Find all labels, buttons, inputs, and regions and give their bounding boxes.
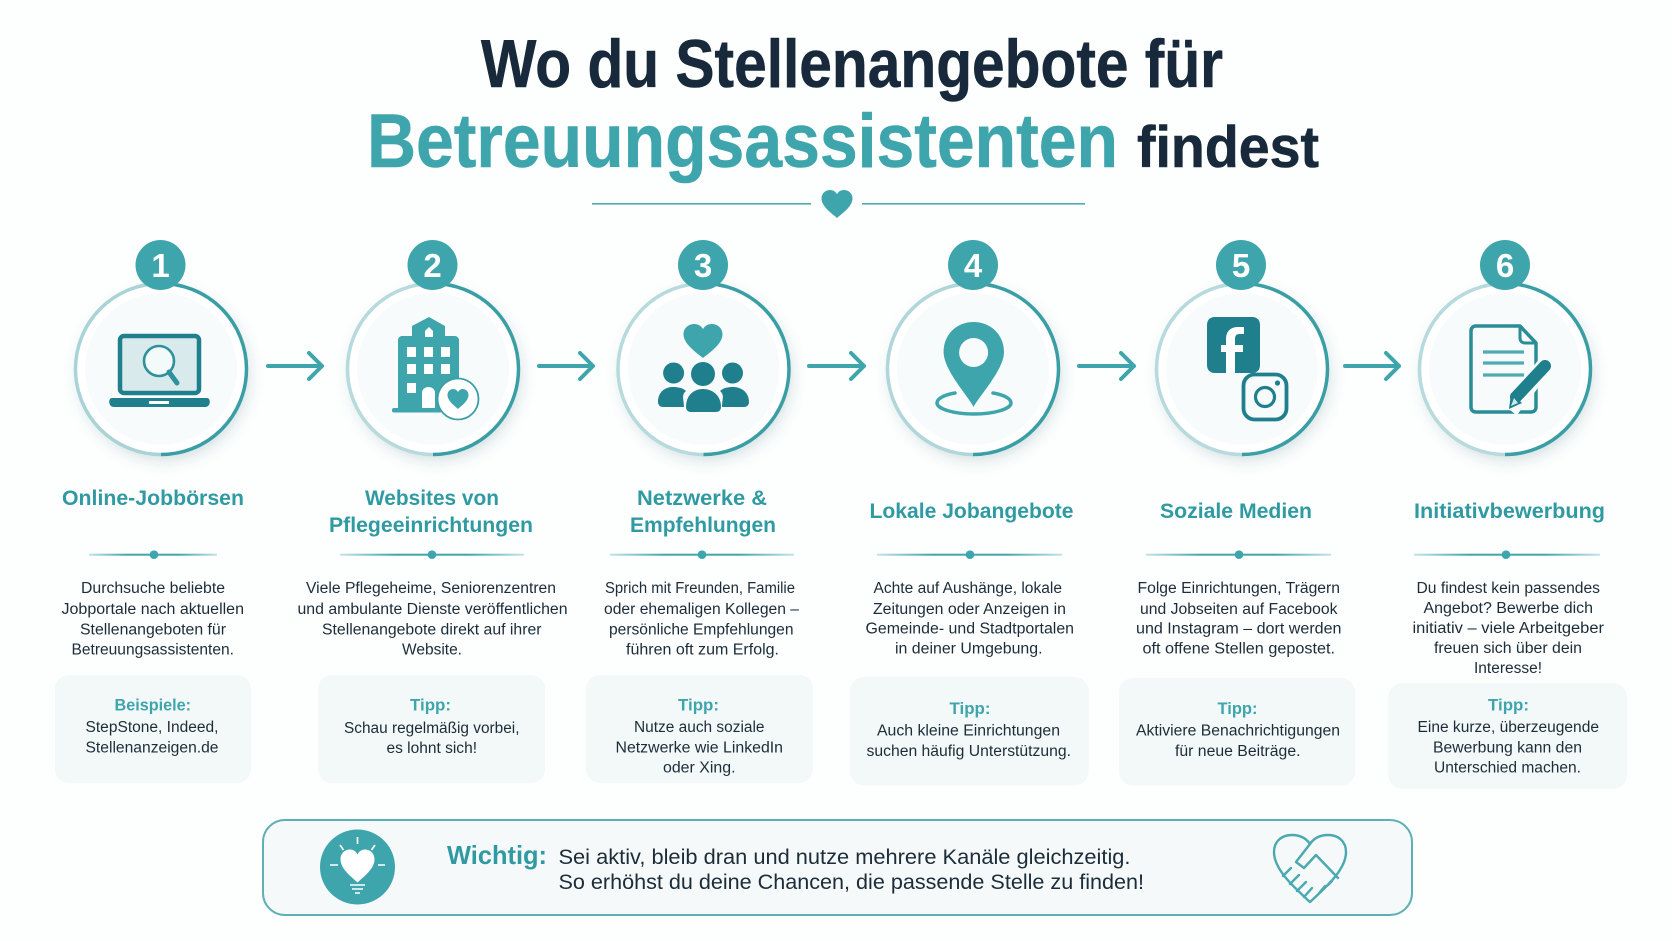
- callout text: [558, 846, 1144, 894]
- arrow 1 to 2: [268, 353, 322, 379]
- column 3 text: [604, 580, 799, 658]
- card 1: Beispiele: Beispiele:: [114, 696, 191, 714]
- card 6: Tipp: [1388, 683, 1627, 789]
- column 4 text: in deiner Umgebung.: [895, 640, 1042, 658]
- icon: document with pen: [1471, 326, 1546, 412]
- column 6 text: Angebot? Bewerbe dich: [1424, 600, 1593, 617]
- column 3 heading: Empfehlungen: [630, 514, 776, 537]
- card 3: Tipp: oder Xing.: [663, 760, 736, 776]
- card 3: Tipp: Nutze auch soziale: [634, 719, 764, 736]
- title: Betreuungsassistenten: [367, 99, 1118, 184]
- title: Wo du Stellenangebote für: [481, 26, 1223, 102]
- callout text: Sei aktiv, bleib dran und nutze mehrere Kanäle gleichzeitig.: [558, 846, 1130, 869]
- card 5: Tipp: Tipp:: [1218, 699, 1258, 718]
- column 3 text: persönliche Empfehlungen: [609, 622, 794, 638]
- card 2: Tipp: Schau regelmäßig vorbei,: [344, 720, 520, 737]
- card 4: Tipp: Auch kleine Einrichtungen: [877, 722, 1060, 740]
- card 3: Tipp: [586, 675, 813, 783]
- icon: laptop with magnifier: [109, 336, 210, 407]
- column 4 text: [866, 580, 1074, 658]
- icon: people with heart: [658, 324, 749, 412]
- step 6 circle: application: [1420, 240, 1590, 454]
- step 4 circle: location: [888, 240, 1058, 454]
- column 4 heading: Lokale Jobangebote: [870, 500, 1074, 523]
- callout label: Wichtig:: [447, 840, 547, 870]
- column 1 text: Durchsuche beliebte: [81, 580, 225, 597]
- card 6: Tipp: Unterschied machen.: [1434, 760, 1581, 776]
- card 2: Tipp: [318, 675, 545, 783]
- badge 3: 3: [694, 247, 712, 284]
- card 3: Tipp: Tipp:: [678, 696, 719, 714]
- badge 1: 1: [151, 247, 170, 284]
- column 2 text: [298, 580, 568, 658]
- column 1 text: Betreuungsassistenten.: [72, 642, 234, 658]
- column 2 text: Stellenangebote direkt auf ihrer: [322, 622, 542, 638]
- column 5 text: Folge Einrichtungen, Trägern: [1138, 580, 1340, 597]
- card 4: Tipp: Tipp:: [950, 699, 990, 718]
- column 5 heading: Soziale Medien: [1160, 500, 1312, 523]
- column 6 text: initiativ – viele Arbeitgeber: [1412, 620, 1604, 637]
- badge 5: 5: [1232, 247, 1250, 284]
- card 3: Tipp: Netzwerke wie LinkedIn: [616, 740, 783, 756]
- step 3 circle: network: [618, 240, 789, 454]
- card 5: Tipp: [1119, 678, 1355, 786]
- title: findest: [1137, 115, 1319, 180]
- column 6 text: freuen sich über dein: [1434, 640, 1582, 657]
- icon: facebook: [1207, 317, 1260, 373]
- column 3 heading: Netzwerke &: [637, 487, 767, 510]
- card 6: Tipp: Bewerbung kann den: [1433, 740, 1582, 756]
- card 5: Tipp: für neue Beiträge.: [1175, 743, 1300, 760]
- arrow 2 to 3: [539, 353, 593, 379]
- column 3 text: oder ehemaligen Kollegen –: [604, 601, 799, 618]
- column 1 text: Stellenangeboten für: [80, 622, 226, 638]
- column 2 heading: [329, 487, 533, 537]
- column 6 text: [1412, 580, 1604, 677]
- title divider with heart: [592, 190, 1085, 218]
- arrow 4 to 5: [1079, 353, 1134, 379]
- column 1 heading: Online-Jobbörsen: [62, 487, 244, 510]
- column 3 text: führen oft zum Erfolg.: [626, 642, 779, 658]
- icon: handshake heart: [1274, 835, 1346, 902]
- column 5 text: und Jobseiten auf Facebook: [1140, 601, 1338, 618]
- arrow 3 to 4: [809, 353, 864, 379]
- column 6 text: Du findest kein passendes: [1416, 580, 1600, 597]
- card 2: Tipp: es lohnt sich!: [386, 740, 477, 757]
- title: [367, 26, 1319, 184]
- column 2 heading: Websites von: [365, 487, 499, 510]
- callout text: So erhöhst du deine Chancen, die passende Stelle zu finden!: [558, 871, 1144, 894]
- column 1 text: Jobportale nach aktuellen: [62, 601, 244, 618]
- column 5 text: oft offene Stellen gepostet.: [1142, 640, 1335, 658]
- badge 6: [1480, 240, 1530, 290]
- icon: map pin: [937, 322, 1011, 414]
- step 5 circle: social media: [1156, 240, 1328, 454]
- badge 4: 4: [964, 247, 983, 284]
- column 3 text: Sprich mit Freunden, Familie: [605, 580, 795, 597]
- column 4 text: Gemeinde- und Stadtportalen: [866, 620, 1074, 638]
- badge 2: [408, 240, 458, 290]
- badge 5: [1216, 240, 1266, 290]
- icon: building with heart: [392, 317, 478, 420]
- card 1: Beispiele: [55, 675, 251, 783]
- badge 1: [136, 240, 186, 290]
- callout: Wichtig: [263, 820, 1412, 915]
- column 6 heading: Initiativbewerbung: [1414, 500, 1605, 523]
- step 1 circle: laptop search: [76, 240, 246, 454]
- column 4 text: Achte auf Aushänge, lokale: [874, 580, 1062, 597]
- card 2: Tipp: Tipp:: [410, 696, 451, 714]
- column 5 text: [1136, 580, 1342, 658]
- card 4: Tipp: suchen häufig Unterstützung.: [866, 743, 1071, 760]
- card 1: Beispiele: Stellenanzeigen.de: [86, 740, 218, 756]
- arrow 5 to 6: [1345, 353, 1399, 379]
- badge 6: 6: [1496, 247, 1514, 284]
- column 2 text: Viele Pflegeheime, Seniorenzentren: [306, 580, 556, 597]
- badge 2: 2: [423, 247, 442, 284]
- column 1 text: [62, 580, 244, 658]
- column 6 text: Interesse!: [1474, 660, 1542, 677]
- card 5: Tipp: Aktiviere Benachrichtigungen: [1136, 722, 1340, 740]
- column 2 heading: Pflegeeinrichtungen: [329, 514, 533, 537]
- badge 4: [948, 240, 998, 290]
- card 6: Tipp: Tipp:: [1488, 696, 1529, 714]
- icon: instagram: [1244, 374, 1286, 420]
- column 2 text: Website.: [402, 642, 462, 658]
- card 6: Tipp: Eine kurze, überzeugende: [1418, 719, 1599, 736]
- card 4: Tipp: [850, 677, 1088, 786]
- icon: light bulb with heart: [320, 830, 395, 904]
- column 4 text: Zeitungen oder Anzeigen in: [873, 601, 1066, 618]
- step 2 circle: care facility: [348, 240, 518, 454]
- card 1: Beispiele: StepStone, Indeed,: [86, 719, 218, 736]
- column 5 text: und Instagram – dort werden: [1136, 620, 1342, 638]
- badge 3: [678, 240, 728, 290]
- column 3 heading: [630, 487, 776, 537]
- column 2 text: und ambulante Dienste veröffentlichen: [298, 601, 568, 618]
